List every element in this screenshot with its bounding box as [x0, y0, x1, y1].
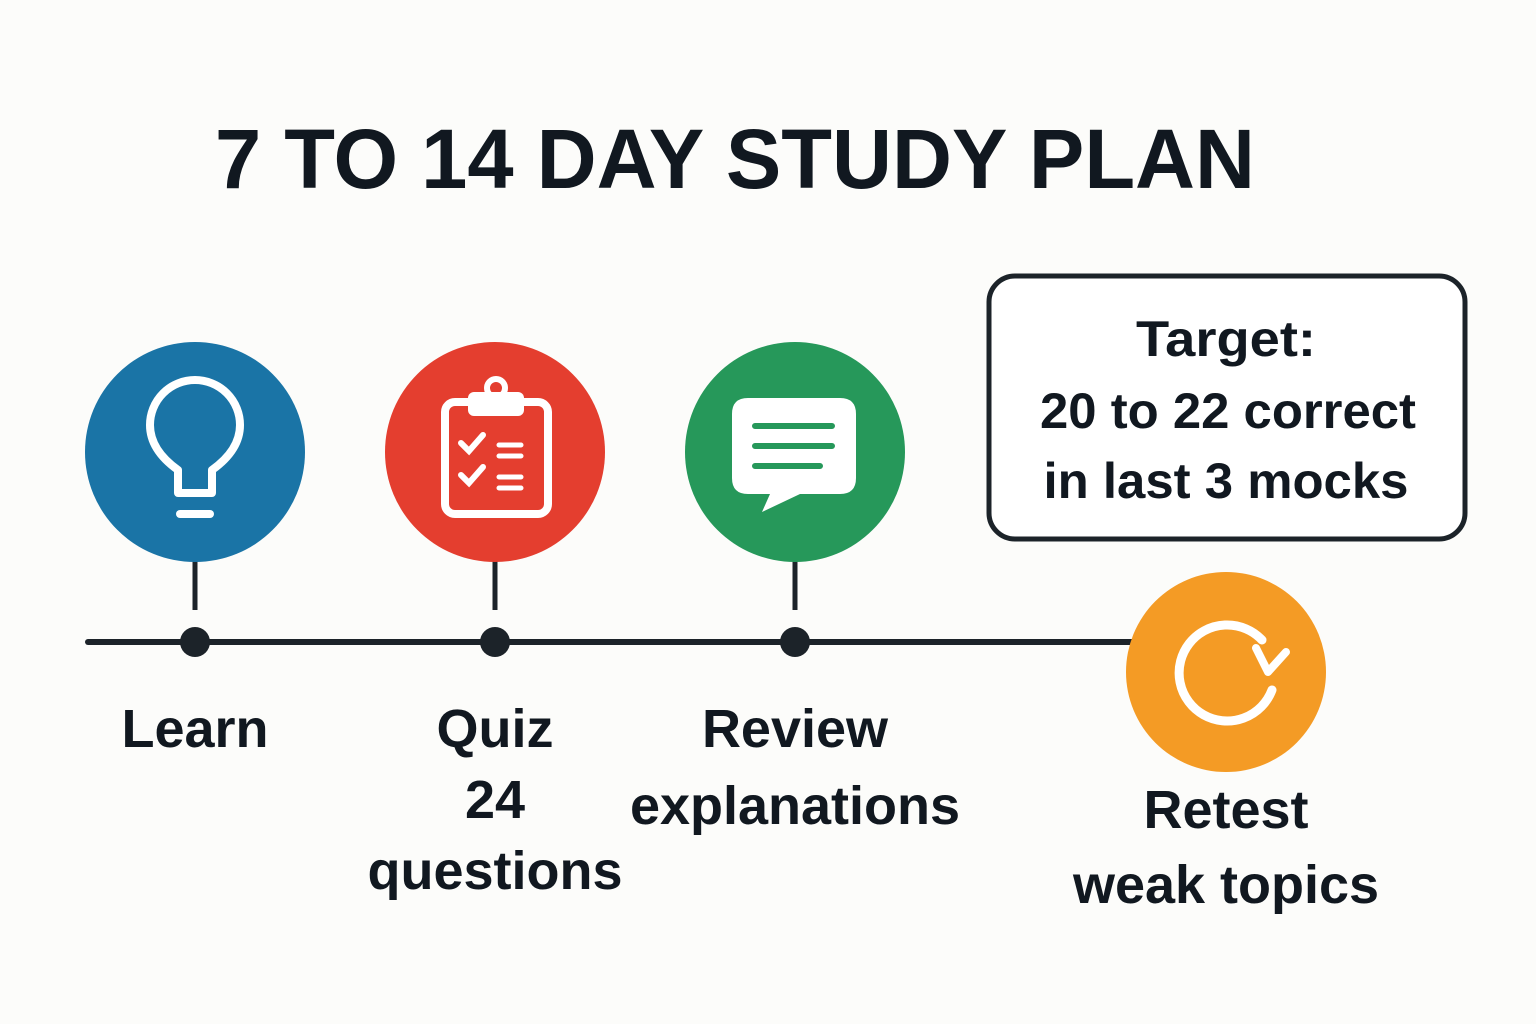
label: review	[630, 699, 960, 836]
label: retest: weak topics	[1072, 855, 1379, 915]
label: quiz	[367, 699, 623, 901]
label: retest: Retest	[1143, 780, 1309, 840]
icon: speech bubble	[685, 342, 905, 562]
title: 7 TO 14 DAY STUDY PLAN	[215, 112, 1255, 206]
callout: target	[989, 276, 1465, 539]
label: quiz: 24	[465, 770, 525, 830]
callout: target: Target:	[1136, 311, 1316, 367]
label: quiz: Quiz	[436, 699, 554, 759]
icon: clipboard	[385, 342, 605, 562]
label: quiz: questions	[367, 841, 623, 901]
timeline	[88, 560, 1135, 657]
label: review: explanations	[630, 776, 960, 836]
label: review: Review	[702, 699, 889, 759]
label: retest	[1072, 780, 1379, 915]
icon: retest cycle	[1126, 572, 1326, 772]
icon: lightbulb	[85, 342, 305, 562]
label: learn: Learn	[121, 699, 269, 759]
callout: target: in last 3 mocks	[1044, 453, 1408, 509]
callout: target: 20 to 22 correct	[1040, 383, 1416, 439]
